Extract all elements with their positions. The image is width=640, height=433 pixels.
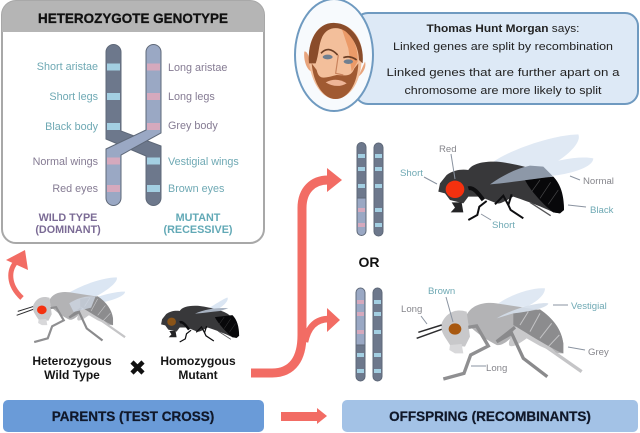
arrow: parents to offspring branches xyxy=(251,168,342,373)
text: heterozygous label: Wild Type xyxy=(44,368,100,382)
text: homozygous label: Mutant xyxy=(178,368,218,382)
text: mutant label: (RECESSIVE) xyxy=(164,224,233,236)
text: right gene labels: Long aristae xyxy=(168,62,227,74)
text: left gene labels xyxy=(33,61,99,195)
arrow: parents to offspring xyxy=(281,408,327,424)
text: heterozygous label xyxy=(32,354,112,382)
icon: cross symbol xyxy=(132,362,143,373)
icon: offspring fly with red eye and black body xyxy=(438,134,593,220)
text: Morgan quote xyxy=(386,23,620,97)
icon: Thomas Hunt Morgan portrait xyxy=(295,0,373,111)
callout: speech bubble xyxy=(355,13,638,104)
text: wild type label: (DOMINANT) xyxy=(35,224,101,236)
text: mutant label: MUTANT xyxy=(176,212,221,224)
panel: parents banner: PARENTS (TEST CROSS) xyxy=(52,409,214,424)
text: Morgan quote: Linked genes are split by recombination xyxy=(393,41,613,53)
icon: heterozygous wild type fly xyxy=(17,277,125,342)
panel: offspring banner xyxy=(342,400,638,432)
panel: offspring banner: OFFSPRING (RECOMBINANTS) xyxy=(389,409,591,424)
panel: parents banner xyxy=(3,400,264,432)
text: left gene labels: Short aristae xyxy=(37,61,98,73)
text: OR: OR xyxy=(358,254,380,270)
icon: homozygous mutant fly xyxy=(161,297,239,342)
text: grey fly callouts: Vestigial xyxy=(571,301,607,312)
text: black fly callouts: Black xyxy=(590,205,614,216)
text: grey fly callouts: Grey xyxy=(588,347,609,358)
arrow: parents to panel xyxy=(6,250,28,298)
text: left gene labels: Normal wings xyxy=(33,156,99,168)
text: black fly callouts xyxy=(400,144,614,231)
text: left gene labels: Short legs xyxy=(49,91,99,103)
text: grey fly callouts xyxy=(401,286,609,374)
text: black fly callouts: Red xyxy=(439,144,457,155)
text: right gene labels: Grey body xyxy=(168,120,218,132)
heading: panel title: HETEROZYGOTE GENOTYPE xyxy=(38,10,228,26)
text: black fly callouts: Short xyxy=(492,220,515,231)
text: left gene labels: Black body xyxy=(45,121,99,133)
chart: crossed chromosomes xyxy=(106,45,161,206)
text: right gene labels xyxy=(168,62,239,195)
text: black fly callouts: Normal xyxy=(583,176,614,187)
text: right gene labels: Brown eyes xyxy=(168,183,225,195)
chart: top offspring chromosomes xyxy=(357,142,383,236)
text: grey fly callouts: Long xyxy=(401,304,422,315)
icon: offspring fly with brown eye and grey body xyxy=(417,288,582,379)
text: Morgan quote: Linked genes that are further apart on a xyxy=(386,67,620,79)
text: heterozygous label: Heterozygous xyxy=(32,354,112,368)
text: grey fly callouts: Brown xyxy=(428,286,455,297)
chart: bottom offspring chromosomes xyxy=(356,288,382,381)
text: right gene labels: Long legs xyxy=(168,91,215,103)
text: Morgan quote: Thomas Hunt Morgan says: xyxy=(426,23,580,35)
text: mutant label xyxy=(164,212,233,236)
text: grey fly callouts: Long xyxy=(486,363,507,374)
text: left gene labels: Red eyes xyxy=(52,183,99,195)
text: wild type label xyxy=(35,212,101,236)
panel: heterozygote genotype xyxy=(2,1,264,243)
text: wild type label: WILD TYPE xyxy=(39,212,97,224)
text: black fly callouts: Short xyxy=(400,168,423,179)
text: homozygous label xyxy=(160,354,236,382)
text: Morgan quote: chromosome are more likely to split xyxy=(404,85,602,97)
text: homozygous label: Homozygous xyxy=(160,354,236,368)
text: right gene labels: Vestigial wings xyxy=(168,156,239,168)
